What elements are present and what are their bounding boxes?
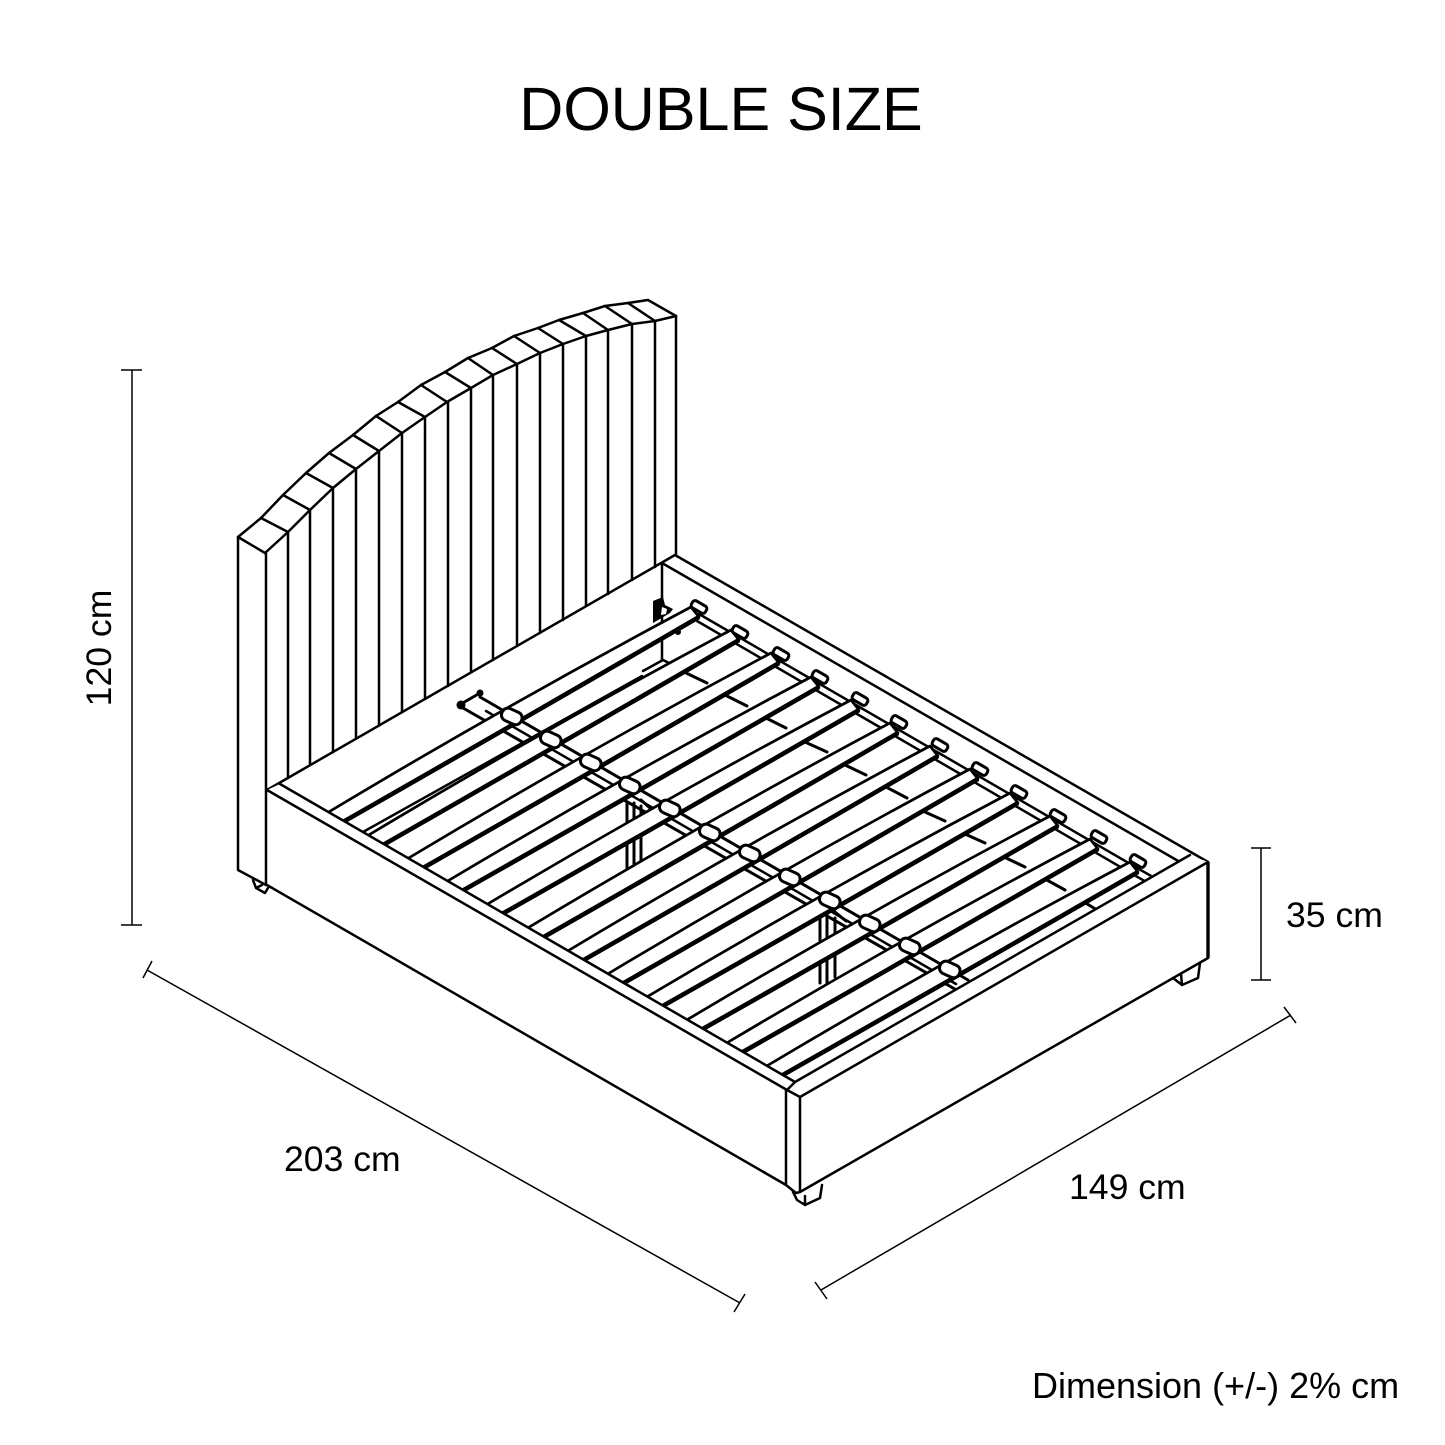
icon: corner bracket	[643, 597, 687, 672]
back rail line	[267, 555, 675, 790]
slat 9	[645, 793, 1018, 1007]
dimension: rail height 35 cm: 35 cm	[1286, 895, 1383, 935]
slat 11	[725, 839, 1098, 1053]
right side rail inner line	[662, 563, 1180, 862]
right end edge	[1206, 862, 1210, 958]
slat 2	[367, 630, 739, 845]
foot side bottom edge	[800, 958, 1208, 1192]
left rail top band	[267, 784, 795, 1090]
slat 12	[765, 862, 1138, 1076]
dimension: height 120 cm	[79, 370, 142, 925]
headboard top ridge segments	[261, 303, 655, 532]
bed base front rails	[267, 784, 1208, 1193]
centre support legs	[627, 800, 846, 983]
back corner post	[661, 563, 663, 660]
tolerance note: Dimension (+/-) 2% cm	[1032, 1365, 1399, 1406]
headboard vertical channels	[266, 316, 676, 885]
dimension: rail height 35 cm	[1251, 848, 1383, 980]
foot rail lines	[795, 855, 1208, 1097]
left rail lines	[267, 784, 795, 1090]
slat 5	[486, 700, 859, 914]
slat 6	[526, 723, 898, 938]
extra thin slat edge	[363, 676, 642, 832]
headboard	[238, 300, 676, 885]
spine lines	[463, 697, 968, 992]
headboard left edge	[238, 537, 266, 885]
left leg	[253, 880, 268, 893]
right-hand slat holder bar	[697, 614, 1158, 883]
right front rail top band	[795, 855, 1208, 1097]
title: DOUBLE SIZE	[519, 75, 923, 143]
spine left end	[461, 693, 480, 704]
dimension: height 120 cm: 120 cm	[79, 590, 119, 706]
dimension: length 203 cm	[143, 961, 745, 1312]
slat 7	[566, 746, 938, 961]
slat 8	[606, 769, 978, 984]
right leg	[1173, 963, 1200, 985]
headboard top inner curve	[265, 316, 676, 553]
dimension: length 203 cm: 203 cm	[284, 1139, 401, 1179]
bed legs	[253, 880, 1200, 1205]
rear support cross lines	[684, 672, 1097, 910]
slat 3	[407, 653, 779, 868]
right-end slat caps	[690, 600, 1147, 868]
dimension: width 149 cm: 149 cm	[1069, 1167, 1186, 1207]
slats	[327, 607, 1138, 1076]
slat 10	[685, 816, 1058, 1030]
dimension: width 149 cm	[815, 1007, 1296, 1299]
slat 1	[327, 607, 699, 822]
front leg	[793, 1185, 822, 1205]
spine slat caps	[500, 706, 962, 980]
slat 4	[446, 677, 819, 891]
bed base back rails	[267, 555, 1208, 862]
long side bottom edge	[267, 885, 786, 1185]
centre spine bar	[456, 690, 968, 992]
headboard top outer curve	[238, 300, 676, 537]
foot corner	[787, 1082, 800, 1097]
corner post	[786, 1090, 800, 1193]
right side rail outer line	[675, 555, 1208, 862]
